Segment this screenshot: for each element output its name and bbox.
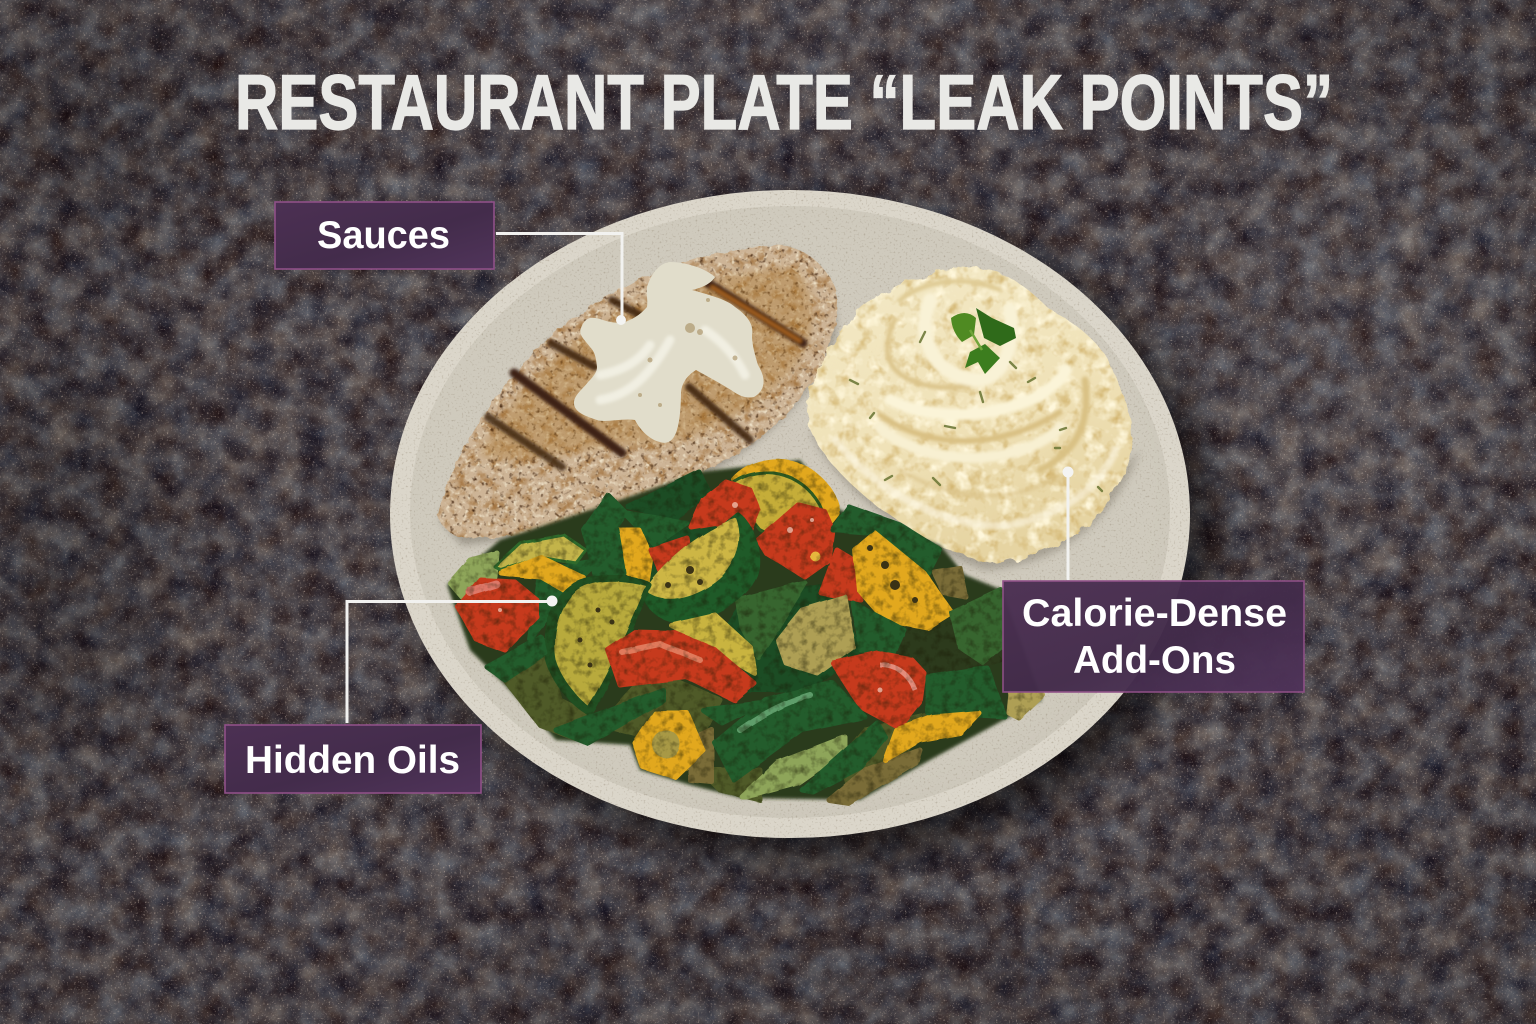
bottom round yellow squash [635, 713, 703, 777]
chicken shadow [440, 250, 836, 545]
center zucchini strip [703, 703, 762, 723]
vegetable pieces [450, 461, 1043, 803]
label: calorie-dense add-ons: Add-Ons [1073, 639, 1236, 682]
yellow pepper left [501, 557, 584, 590]
leader line: sauces [496, 234, 626, 325]
plate shadow [410, 210, 1214, 862]
label: sauces: Sauces [317, 214, 450, 257]
tomato left [458, 580, 537, 650]
yellow pepper strip [616, 530, 651, 583]
small tomato middle [651, 538, 689, 577]
mash herb flecks [850, 332, 1102, 491]
tomato right [758, 505, 833, 577]
green right block [928, 668, 1005, 717]
tomato and squash highlights [498, 502, 882, 692]
left large zucchini [546, 577, 649, 714]
label: hidden oils [225, 725, 481, 793]
grill marks [488, 283, 803, 467]
tomato top [691, 482, 758, 530]
leader line: calorie-dense add-ons [1062, 466, 1074, 580]
yellow strip bottom right [885, 713, 979, 760]
label: calorie-dense add-ons: Calorie-Dense [1022, 592, 1287, 635]
label: hidden oils: Hidden Oils [245, 739, 460, 782]
sauce highlights [600, 330, 745, 400]
small green lower left [487, 637, 545, 680]
grilled chicken breast [438, 245, 837, 545]
rear brown pieces [934, 568, 966, 597]
green block right [853, 603, 904, 657]
bottom zucchini strips [742, 737, 845, 797]
olive zucchini slice [778, 597, 853, 673]
green leaf [624, 513, 687, 545]
mash swirl ridges [835, 281, 1115, 525]
sauce on chicken [574, 262, 764, 443]
zucchini behind top [734, 461, 837, 525]
squash char flecks and glaze [578, 545, 918, 668]
plate [390, 190, 1214, 862]
mashed potatoes [806, 268, 1140, 570]
vegetable pile base [447, 460, 1042, 800]
red pepper long [608, 632, 754, 700]
lower left zucchini strip [556, 690, 663, 743]
light green leaf [450, 553, 497, 597]
red pepper piece [821, 550, 861, 600]
chicken meat [438, 245, 837, 538]
label: sauces [275, 202, 494, 269]
tomato lower right [833, 653, 924, 728]
center squash slice [671, 615, 754, 673]
central large zucchini [643, 515, 757, 620]
upper left zucchini [495, 535, 586, 570]
mash mound [806, 268, 1132, 563]
green pepper strip [584, 495, 626, 577]
chicken golden crust [480, 268, 813, 459]
green zucchini strip top [628, 472, 709, 518]
green zucchini top right [833, 507, 940, 573]
sauce herb specks [638, 298, 738, 407]
plate rim [390, 190, 1190, 838]
sauteed vegetables [447, 460, 1043, 803]
yellow squash slice [855, 533, 952, 628]
leader line: hidden oils [347, 596, 558, 723]
mash shadow [810, 430, 1140, 570]
herb leaves center [738, 583, 805, 657]
plate well [410, 206, 1170, 818]
label: calorie-dense add-ons [1003, 581, 1304, 692]
parsley garnish [951, 308, 1016, 374]
filler: dark herbs and oil [505, 640, 590, 738]
green leaf right [952, 590, 1001, 663]
bottom big zucchini arc [715, 683, 865, 780]
